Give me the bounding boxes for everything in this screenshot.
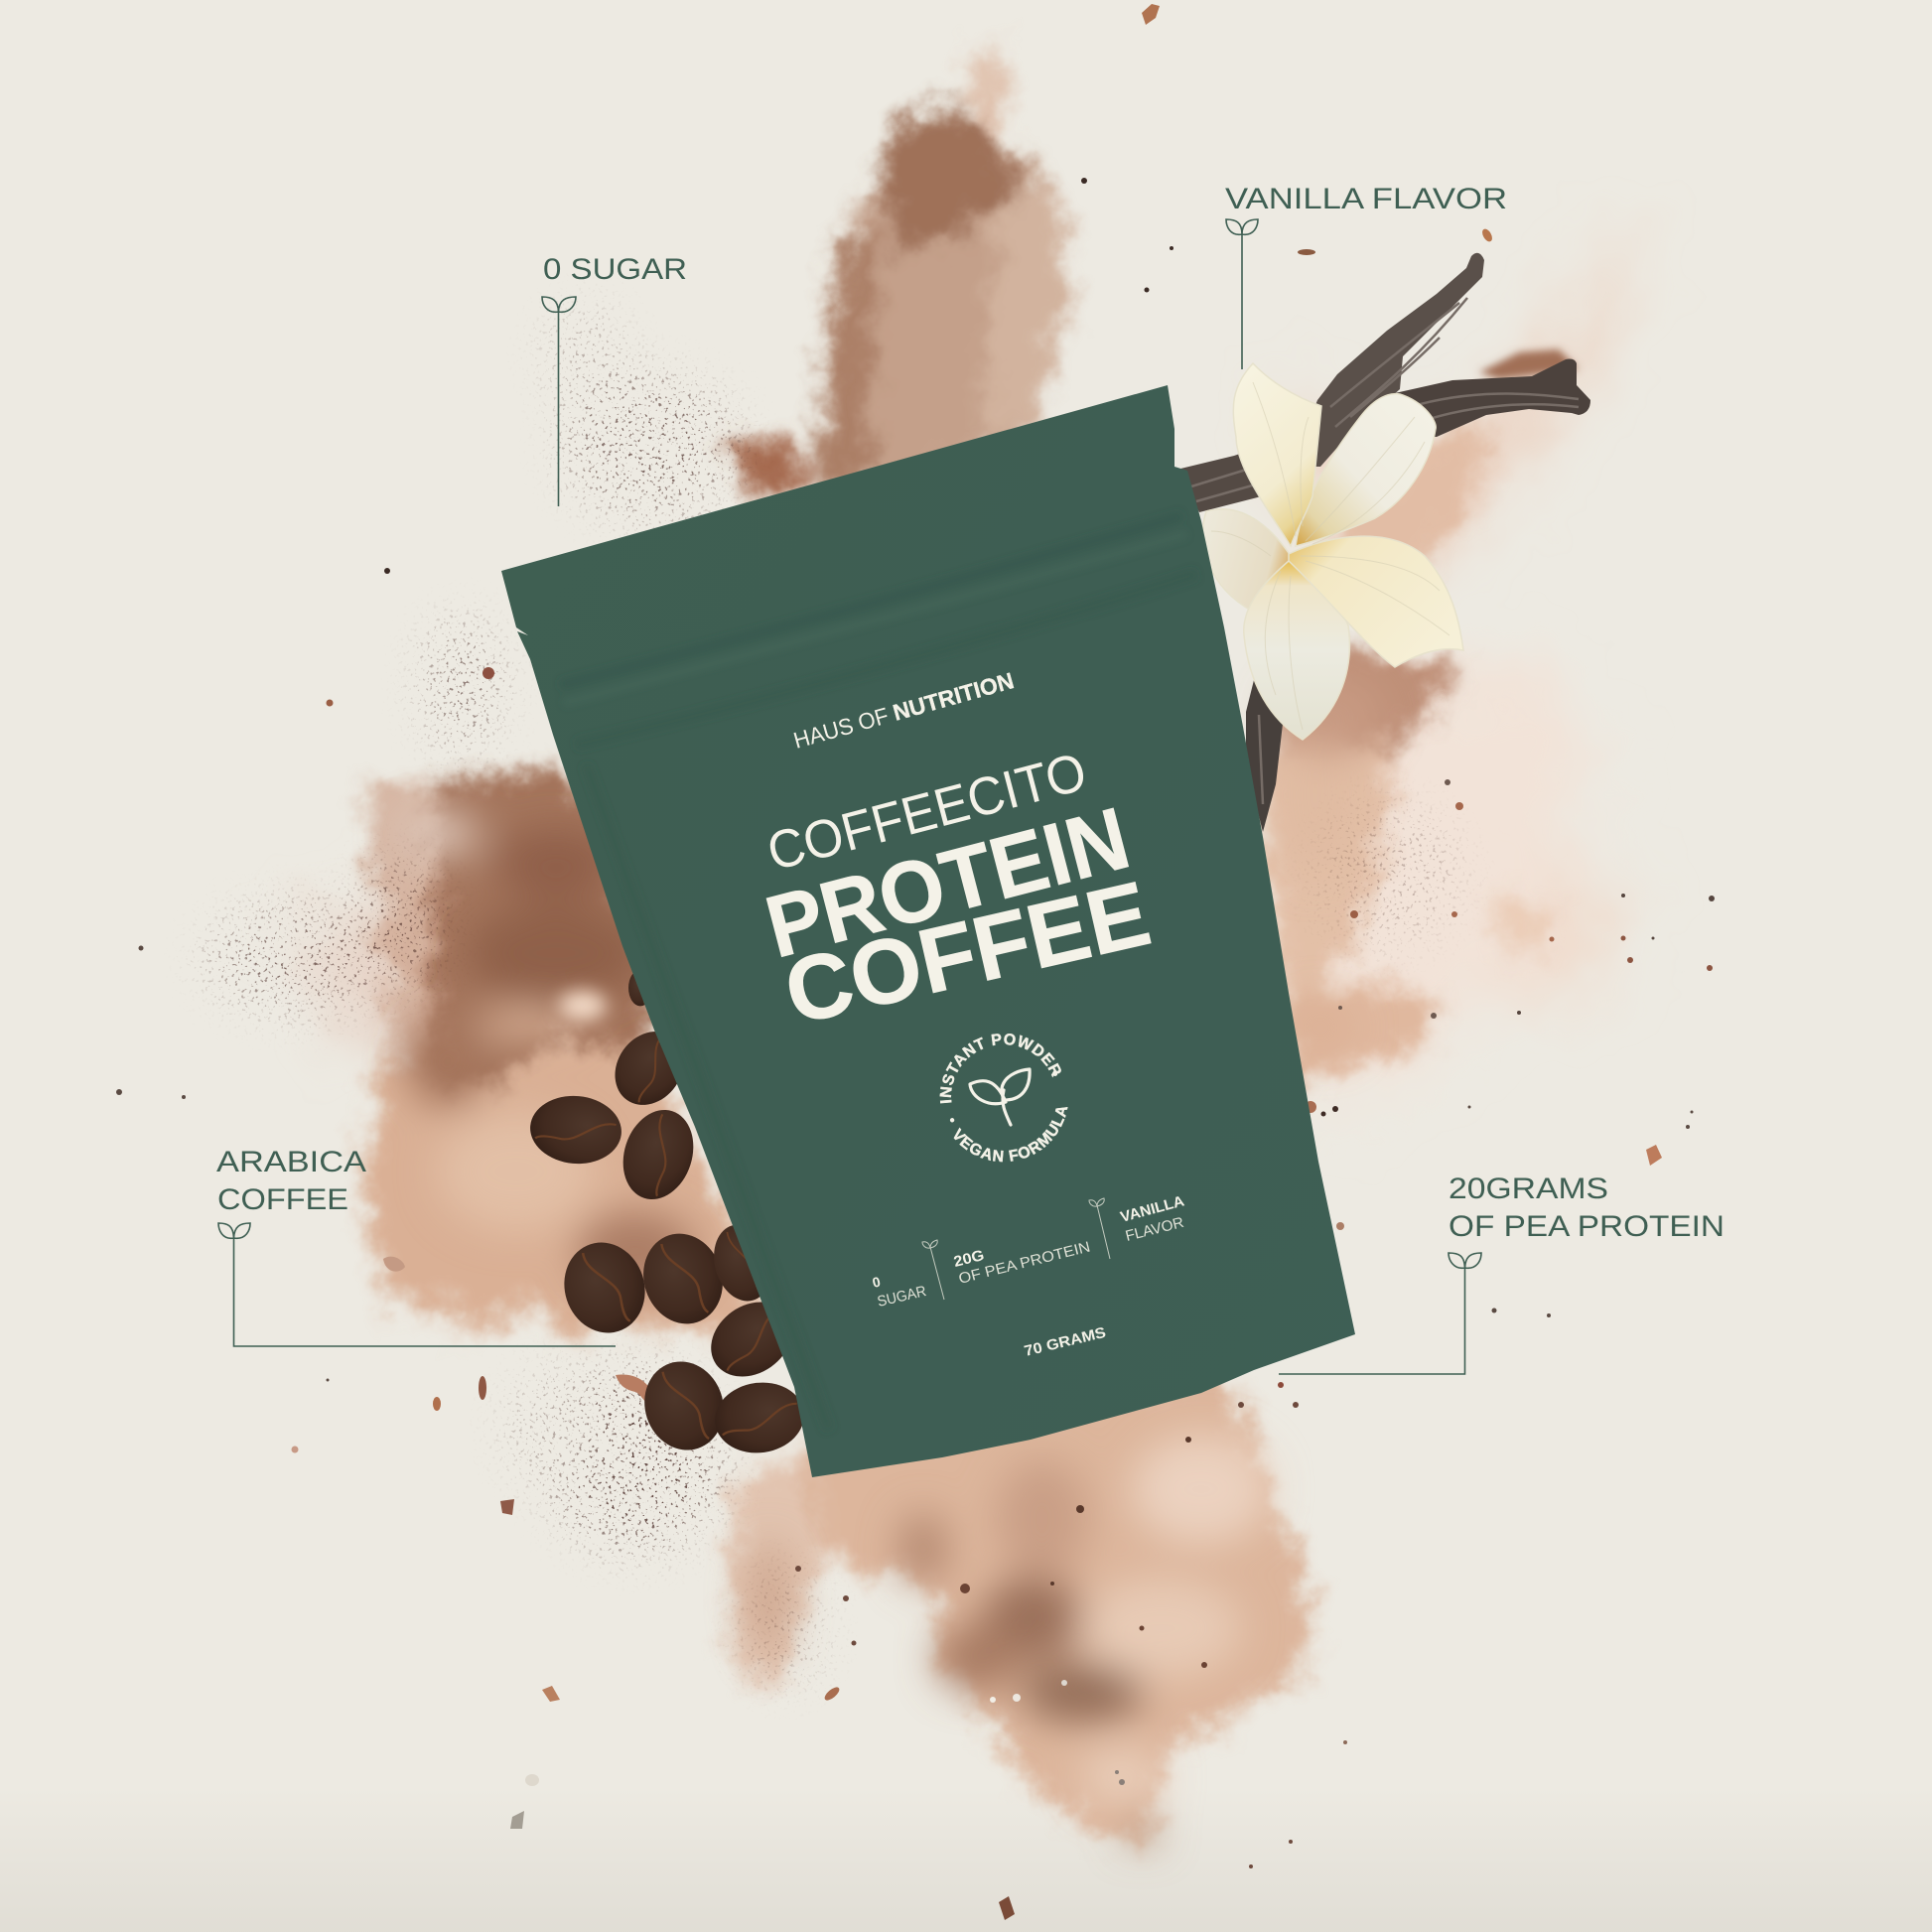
left cloud shading: [395, 810, 695, 1291]
pod upper: [1291, 253, 1484, 467]
brown patch by vanilla: [1479, 349, 1579, 379]
label: VANILLA FLAVOR: [1225, 183, 1507, 215]
bean: [633, 1351, 735, 1460]
left cloud lower: [362, 1033, 774, 1340]
info: 20g of pea protein: 20G: [952, 1247, 986, 1271]
pouch: [501, 385, 1355, 1477]
petal top right: [1296, 394, 1436, 546]
coffee beans: [527, 970, 809, 1460]
zipper seal band: [561, 516, 1196, 1430]
pouch body: [501, 385, 1355, 1477]
product line: COFFEECITO: [761, 742, 1092, 883]
label: 20GRAMS: [1449, 1173, 1608, 1205]
callout: arabica coffee: [216, 1146, 616, 1346]
label: ARABICA: [216, 1146, 366, 1178]
icon: small sprout: [1089, 1198, 1110, 1259]
info: vanilla flavor: [1119, 1192, 1186, 1245]
icon: small sprout: [922, 1240, 944, 1300]
bean: [612, 1101, 705, 1208]
left cloud upper: [422, 769, 660, 1092]
net weight: 70 GRAMS: [1023, 1324, 1108, 1360]
petal bottom: [1244, 561, 1349, 740]
info: 0 sugar: 0: [871, 1274, 882, 1291]
callout: vanilla flavor: [1225, 183, 1507, 369]
bean: [710, 1377, 809, 1458]
vanilla pods: [1176, 253, 1590, 832]
info: 0 sugar: SUGAR: [876, 1283, 928, 1311]
icon: sprout: [542, 297, 576, 506]
badge: [939, 1034, 1068, 1162]
product title: PROTEIN: [757, 788, 1139, 976]
bean: [628, 970, 652, 1006]
bean: [632, 1223, 734, 1334]
callout: 0 sugar: [542, 253, 687, 506]
icon: sprout with leader: [218, 1223, 616, 1346]
right cloud shading: [1271, 675, 1385, 1055]
brand name: HAUS OF: [790, 702, 892, 754]
bean: [553, 1232, 656, 1343]
powder clouds: [362, 45, 1549, 1850]
label: COFFEE: [217, 1183, 348, 1216]
info: 20g of pea protein: OF PEA PROTEIN: [957, 1238, 1092, 1288]
info: vanilla flavor: FLAVOR: [1124, 1214, 1185, 1245]
label: OF PEA PROTEIN: [1449, 1210, 1725, 1243]
bottom cloud shading: [750, 1435, 1271, 1846]
bean: [697, 1287, 806, 1392]
brand name: [790, 667, 1017, 754]
bean: [527, 1092, 624, 1168]
petal top left: [1233, 363, 1321, 546]
speckled powder particles: [183, 288, 1475, 1702]
pod texture: [1191, 298, 1579, 804]
badge ring text: INSTANT POWDER: [939, 1034, 1061, 1104]
icon: plant: [970, 1069, 1030, 1125]
petal left: [1202, 509, 1293, 612]
powder explosion: [298, 45, 1638, 1850]
powder highlight: [559, 991, 607, 1021]
brand name: NUTRITION: [891, 667, 1017, 726]
right cloud: [1286, 645, 1467, 784]
petal veins: [1211, 382, 1449, 730]
icon: sprout: [1226, 219, 1258, 369]
petal right: [1289, 536, 1463, 667]
bottom shadow: [0, 1787, 1932, 1932]
product title: COFFEE: [776, 863, 1159, 1043]
callout: 20 grams of pea protein: [1279, 1173, 1725, 1374]
info: 0 sugar: [871, 1274, 928, 1311]
vanilla flower: [1202, 363, 1463, 740]
icon: sprout with leader: [1279, 1253, 1481, 1374]
pod left stub: [1176, 442, 1281, 512]
label: 0 SUGAR: [543, 253, 687, 286]
badge ring text: VEGAN FORMULA: [953, 1107, 1068, 1162]
bean: [601, 1019, 698, 1118]
info: vanilla flavor: VANILLA: [1119, 1192, 1186, 1226]
pod right: [1395, 359, 1590, 437]
bean: [706, 1218, 779, 1308]
badge ring text: [939, 1034, 1068, 1162]
pod lower: [1246, 672, 1283, 832]
pale powder haze: [298, 228, 1638, 1112]
bottom cloud body: [730, 1459, 834, 1683]
